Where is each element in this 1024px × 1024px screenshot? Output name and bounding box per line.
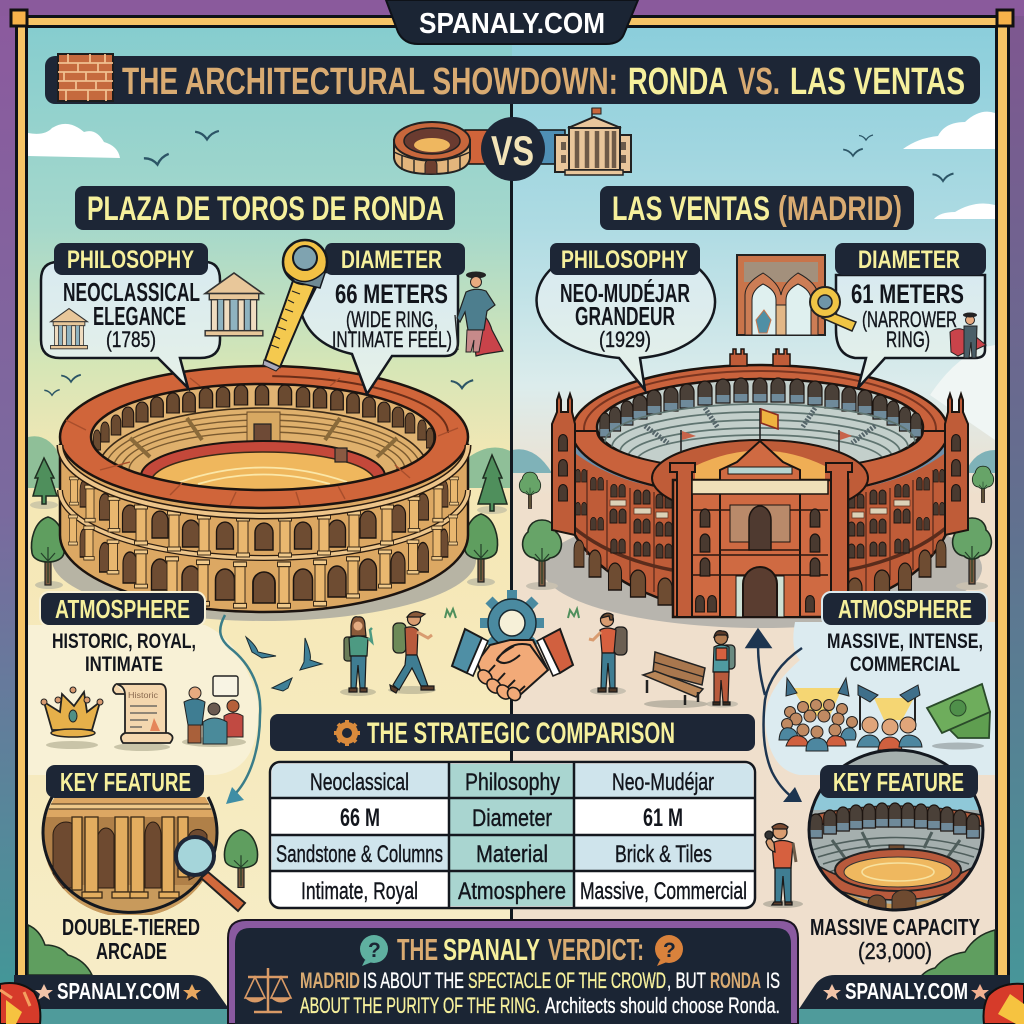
panel: right atmosphere: ATMOSPHERE [838,594,972,624]
panel: right atmosphere [765,592,995,775]
table text: Atmosphere [458,878,566,905]
title text: LAS VENTAS [790,61,965,103]
star [183,984,201,1000]
verdict text: SPECTACLE OF THE CROWD [468,968,666,993]
footer badge left: SPANALY.COM [57,978,180,1004]
middle band [60,490,468,558]
panel: left atmosphere: INTIMATE [85,653,163,676]
panel: left key feature: ARCADE [96,938,167,964]
callout: Las Ventas philosophy: GRANDEUR [575,301,675,331]
arena medallion [805,750,990,915]
tourist with camera [763,824,803,908]
bench [643,652,708,708]
icon: money [927,684,990,750]
panel: Ronda arena [30,366,507,621]
tourist: man gesturing [589,613,627,695]
comparison table [270,762,755,908]
callout: Las Ventas diameter: DIAMETER [858,246,960,274]
icon: matador [455,272,503,356]
lower columns [68,515,458,608]
arrow: right atmosphere to arena and key feature [747,630,802,802]
flags [681,408,852,452]
icon: crown [41,687,103,749]
icon: madrid building [555,108,631,175]
callout: Ronda philosophy: (1785) [106,327,156,352]
star [35,984,53,1000]
icon: tape measure [263,240,327,371]
back arcade [600,378,921,437]
verdict text [300,968,780,1018]
callout: Las Ventas diameter: RING) [886,327,930,352]
panel: left atmosphere: HISTORIC, ROYAL, [52,630,196,653]
wall pilasters [587,470,933,592]
top turrets [730,349,790,366]
versus emblem [394,108,631,181]
arcade medallion [40,790,225,915]
rim joints [66,378,458,505]
verdict heading: THE [397,932,438,967]
heading: Las Ventas [600,186,914,230]
upper columns [69,477,459,557]
wall tile bands [610,500,910,518]
key feature arches [810,803,979,838]
icon: historic scroll: Historic [128,691,158,700]
callout: Las Ventas philosophy: PHILOSOPHY [561,246,688,274]
callout: Las Ventas philosophy: (1929) [599,327,651,352]
panel: right atmosphere: COMMERCIAL [850,653,960,676]
panel: left key feature: KEY FEATURE [60,767,191,797]
callout: Ronda diameter: 66 METERS [335,279,448,309]
table text: Diameter [472,805,552,832]
main facade [670,441,852,617]
verdict text: IS ABOUT THE [363,968,464,993]
callout: Las Ventas diameter [835,243,986,388]
icon: small matador [950,312,986,358]
tree [225,830,257,888]
footer badge right [799,975,1010,1009]
icon: teal question: ? [368,939,381,962]
icon: red seal left [0,983,40,1024]
table text [276,769,747,905]
grass tufts [445,609,579,618]
table text: Intimate, Royal [301,878,418,905]
front rim [572,431,948,497]
verdict text: RONDA [710,968,761,993]
panel: right key feature: KEY FEATURE [833,767,964,797]
verdict heading: VERDICT: [548,932,644,967]
panel: left key feature: DOUBLE-TIERED [62,914,200,940]
table text: Massive, Commercial [580,878,747,905]
rim cornice [60,445,468,516]
table text: 61 M [643,804,683,832]
heading: Ronda [75,186,455,230]
panel: verdict [228,920,798,1024]
vs text: VS [491,127,534,174]
panel: right key feature: (23,000) [858,938,932,964]
verdict heading [397,932,644,967]
panel: right atmosphere: MASSIVE, INTENSE, [827,630,983,653]
panel: left key feature [40,765,257,964]
back arcade [93,385,434,450]
callout: Ronda diameter: DIAMETER [341,246,442,274]
icon: mudejar arch [737,255,825,335]
icon: teal question [360,935,388,966]
callout: Ronda philosophy [41,243,220,388]
panel: Las Ventas arena [519,349,994,628]
rim [60,366,468,508]
top badge [386,0,638,44]
star [971,984,989,1000]
icon: scales [245,968,291,1012]
verdict text: MADRID [300,968,360,993]
rim [572,365,948,497]
lower tier arches [80,529,448,603]
comparison header: THE STRATEGIC COMPARISON [367,717,675,750]
callout: Ronda philosophy: PHILOSOPHY [67,246,194,274]
heading: Las Ventas: LAS VENTAS [612,190,770,228]
icon: crowd under spotlights [779,678,858,751]
icon: small tape measure [810,287,856,331]
trees [30,455,507,589]
verdict heading: SPANALY [443,932,540,967]
title text: VS. [738,61,780,103]
table text: Material [476,841,548,868]
verdict text: IS [766,968,780,993]
icon: handshake with gear [452,590,573,703]
callout: Ronda philosophy: ELEGANCE [93,301,186,331]
grey seating [605,404,915,489]
wall arches [574,540,946,605]
interior [92,385,434,489]
icon: stage lights and people [857,685,922,750]
upper tier arches [80,481,448,550]
title text: RONDA [628,61,728,103]
callout: Ronda diameter: INTIMATE FEEL) [332,327,452,352]
tourist: woman with backpack [706,631,738,708]
icon: magnifier [176,837,245,911]
icon: brick wall [58,54,113,101]
seating [102,407,424,470]
callout: Las Ventas philosophy [537,243,715,390]
title bar [45,54,980,104]
callout: Las Ventas philosophy: NEO-MUDÉJAR [560,278,690,308]
tourist: woman in green [340,617,376,696]
gear [480,590,544,656]
towers [552,394,968,535]
callout: Las Ventas diameter: (NARROWER [862,307,957,332]
tourist: walking man [388,612,436,694]
table text: Brick & Tiles [615,841,712,868]
center divider [510,104,513,920]
wall windows [575,469,945,558]
icon: orange question: ? [663,939,676,962]
bush left [28,925,92,975]
icon: group of visitors [182,676,246,747]
heading: Las Ventas: (MADRID) [778,190,902,228]
badge text: SPANALY.COM [419,8,605,40]
icon: small arena [394,122,470,174]
panel: left atmosphere [28,592,258,775]
panel: left atmosphere: ATMOSPHERE [55,594,190,624]
footer badge right: SPANALY.COM [845,978,968,1004]
callout: Las Ventas diameter: 61 METERS [851,279,964,309]
icon: historic scroll [113,684,173,751]
arrow: left atmosphere to key feature [220,615,260,804]
bush right [918,930,995,980]
table text: Neoclassical [310,769,409,796]
icon: orange question [655,935,683,966]
table text: 66 M [340,804,380,832]
table text: Philosophy [465,769,560,796]
panel: right key feature [805,750,990,964]
birds flying on plaza [246,637,322,691]
verdict text: , BUT [667,968,706,993]
callout: Ronda philosophy: NEOCLASSICAL [63,277,200,307]
title text: THE ARCHITECTURAL SHOWDOWN: [122,61,618,103]
star [823,984,841,1000]
table text: Sandstone & Columns [276,841,443,868]
icon: red seal right [984,984,1024,1024]
ring [140,440,386,476]
callout: Ronda diameter: (WIDE RING, [346,307,438,332]
icon: small temple [51,309,87,349]
birds [44,131,954,395]
decorative clouds and hills [28,112,995,488]
table text: Neo-Mudéjar [612,769,714,796]
footer badge left [14,975,229,1009]
comparison header [270,714,755,751]
icon: gear [334,720,360,746]
verdict text: Architects should choose Ronda. [545,993,780,1018]
callout: Ronda diameter [302,243,465,394]
orange interior [695,450,825,480]
icon: large temple [205,273,263,336]
trees [519,466,994,590]
verdict text: ABOUT THE PURITY OF THE RING. [300,993,540,1018]
heading: Ronda: PLAZA DE TOROS DE RONDA [87,190,444,228]
